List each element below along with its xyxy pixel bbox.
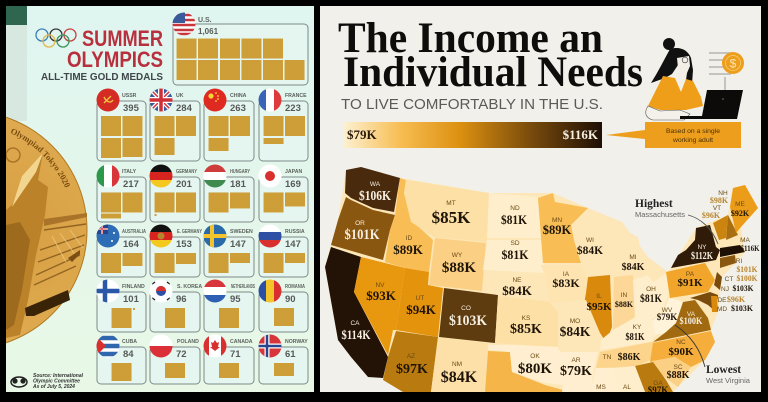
country: Russia: 147 bbox=[285, 239, 301, 250]
state: Virginia bbox=[653, 300, 711, 342]
map labels: $106K bbox=[359, 189, 391, 204]
country: Canada: CANADA bbox=[230, 339, 253, 345]
map labels: SC bbox=[673, 364, 683, 371]
callout: highest: Massachusetts bbox=[635, 210, 685, 219]
country: Australia: 164 bbox=[123, 239, 140, 250]
country: Australia: AUSTRALIA bbox=[122, 229, 146, 235]
panel: income an individual needs bbox=[320, 6, 761, 395]
icon: dollar coin bbox=[709, 52, 744, 90]
map labels: $90K bbox=[668, 346, 694, 358]
map labels: IA bbox=[563, 271, 570, 278]
country: Norway: 61 bbox=[285, 349, 296, 360]
map labels: IL bbox=[596, 293, 602, 300]
country: Romania: 90 bbox=[285, 294, 296, 305]
map labels: CO bbox=[461, 305, 471, 312]
map labels: OK bbox=[530, 353, 540, 360]
country: Germany: GERMANY bbox=[176, 169, 197, 175]
state: Minnesota bbox=[538, 193, 588, 263]
source note bbox=[32, 373, 84, 390]
state: Delaware bbox=[711, 296, 718, 312]
country: France: 223 bbox=[285, 103, 301, 114]
callout: highest bbox=[635, 198, 685, 219]
country: Canada: 71 bbox=[230, 349, 241, 360]
country: Australia bbox=[96, 224, 146, 277]
state: California bbox=[325, 247, 388, 378]
country: Poland: 72 bbox=[176, 349, 187, 360]
country: S. Korea: 96 bbox=[176, 294, 187, 305]
map labels: NY bbox=[697, 244, 707, 251]
state: Colorado bbox=[439, 288, 498, 343]
state: Connecticut bbox=[720, 255, 736, 268]
panel: summer olympics gold medals bbox=[6, 6, 314, 392]
callout: single working adult: working adult bbox=[672, 137, 713, 144]
legend gradient bar: $116K bbox=[563, 127, 599, 142]
olympic rings bbox=[36, 29, 76, 47]
country: Norway: NORWAY bbox=[285, 339, 308, 345]
state: Ohio bbox=[633, 272, 668, 320]
map labels: $93K bbox=[366, 288, 397, 303]
map labels: $79K bbox=[657, 312, 677, 322]
state: Wisconsin bbox=[573, 218, 622, 277]
country: UK bbox=[149, 88, 200, 161]
ribbon strip bbox=[6, 6, 27, 121]
state: Georgia bbox=[635, 362, 673, 392]
country: Germany bbox=[149, 164, 200, 222]
map labels: $100K bbox=[736, 273, 758, 283]
state: Michigan bbox=[618, 232, 648, 275]
source note: Olympic Committee bbox=[33, 378, 80, 384]
country: Netherlands: 95 bbox=[230, 294, 241, 305]
country: USSR: 395 bbox=[123, 103, 140, 114]
country: Finland: FINLAND bbox=[122, 284, 145, 290]
map labels: RI bbox=[736, 258, 742, 265]
country: China bbox=[203, 88, 254, 161]
country: USSR bbox=[96, 88, 146, 161]
legend gradient bar: $79K bbox=[347, 127, 378, 142]
map labels: $83K bbox=[552, 276, 580, 290]
map labels: $100K bbox=[680, 316, 702, 326]
country: E. Germany bbox=[149, 224, 202, 277]
country: S. Korea bbox=[149, 279, 202, 332]
map labels: $101K bbox=[344, 227, 380, 243]
map labels: UT bbox=[416, 295, 424, 302]
map labels: WV bbox=[662, 307, 673, 314]
country: S. Korea: S. KOREA bbox=[177, 284, 202, 290]
map labels: $85K bbox=[432, 208, 471, 227]
country: Italy: 217 bbox=[123, 179, 139, 190]
icon: woman at laptop bbox=[646, 38, 743, 120]
country: China: CHINA bbox=[230, 93, 247, 99]
country: Romania bbox=[258, 279, 308, 332]
country: Russia: RUSSIA bbox=[285, 229, 305, 235]
country: Hungary: HUNGARY bbox=[230, 169, 250, 175]
country: Cuba bbox=[96, 334, 146, 384]
title: OLYMPICS bbox=[67, 47, 163, 72]
country: Japan bbox=[258, 164, 308, 222]
arrow: to Massachusetts bbox=[688, 215, 718, 244]
state: Massachusetts bbox=[720, 245, 745, 257]
country: Netherlands: NETHERLANDS bbox=[231, 284, 255, 290]
country: China: 263 bbox=[230, 103, 246, 114]
state: Utah bbox=[396, 268, 443, 337]
map labels: WA bbox=[370, 181, 381, 188]
map labels: ID bbox=[406, 235, 413, 242]
map labels: $103K bbox=[731, 303, 753, 313]
country: Sweden bbox=[203, 224, 254, 277]
country: France bbox=[258, 88, 308, 161]
map labels: $88K bbox=[442, 260, 476, 276]
state: West Virginia bbox=[653, 298, 685, 335]
title: SUMMER bbox=[82, 26, 163, 51]
map labels: ME bbox=[735, 201, 746, 208]
choropleth map of US states bbox=[325, 167, 758, 392]
state: Kentucky bbox=[600, 317, 661, 350]
map labels: $81K bbox=[626, 332, 645, 343]
map labels: NE bbox=[512, 277, 522, 284]
map labels: MO bbox=[570, 318, 580, 325]
country: E. Germany: E. GERMANY bbox=[177, 229, 202, 235]
map labels: MT bbox=[446, 200, 456, 207]
map labels: $81K bbox=[501, 212, 528, 227]
map labels: DE bbox=[717, 297, 727, 304]
state: North Carolina bbox=[650, 331, 715, 367]
country: Japan: 169 bbox=[285, 179, 301, 190]
map labels: $98K bbox=[710, 196, 729, 205]
state: Maryland bbox=[690, 292, 718, 312]
country: Finland: 101 bbox=[123, 294, 140, 305]
map labels: GA bbox=[653, 380, 663, 387]
title bbox=[41, 30, 163, 80]
state: Washington bbox=[345, 167, 400, 212]
map labels: VA bbox=[687, 311, 696, 318]
state: New York bbox=[671, 225, 720, 268]
map labels: $94K bbox=[406, 302, 437, 317]
publisher logo bbox=[11, 377, 27, 387]
map labels: MS bbox=[596, 384, 607, 391]
map labels: $101K bbox=[736, 264, 758, 274]
state: Indiana bbox=[613, 275, 635, 330]
heading: The Income an bbox=[338, 15, 603, 62]
country: Italy: ITALY bbox=[122, 169, 137, 175]
state: Missouri bbox=[550, 300, 606, 351]
map labels: PA bbox=[686, 271, 695, 278]
country: Finland bbox=[96, 279, 146, 332]
subtitle: TO LIVE COMFORTABLY IN THE U.S. bbox=[341, 96, 603, 113]
map labels: NH bbox=[718, 190, 728, 197]
map labels: $88K bbox=[667, 370, 690, 381]
state: Wyoming bbox=[429, 238, 486, 291]
map labels: SD bbox=[510, 240, 520, 247]
country: U.S.: 1,061 bbox=[198, 27, 219, 36]
source note: As of July 5, 2024 bbox=[32, 384, 75, 390]
callout: single working adult bbox=[606, 122, 741, 148]
source note: Source: International bbox=[33, 373, 84, 379]
state: South Carolina bbox=[652, 357, 691, 387]
map labels: $84K bbox=[560, 324, 591, 339]
country: Hungary: 181 bbox=[230, 179, 247, 190]
country: Japan: JAPAN bbox=[285, 169, 302, 175]
map labels: $114K bbox=[342, 327, 371, 342]
state: Oregon bbox=[331, 197, 395, 260]
state: Arkansas bbox=[558, 352, 598, 392]
map labels: $96K bbox=[702, 211, 721, 220]
country: Poland: POLAND bbox=[177, 339, 199, 345]
map labels: MD bbox=[717, 306, 727, 313]
country: Russia bbox=[258, 224, 308, 277]
country: Hungary bbox=[203, 164, 254, 222]
map labels: $81K bbox=[640, 291, 663, 305]
country: Romania: ROMANIA bbox=[285, 284, 305, 290]
map labels: AZ bbox=[407, 353, 415, 360]
map labels: AR bbox=[571, 357, 581, 364]
state: Nebraska bbox=[482, 272, 550, 303]
country: UK: UK bbox=[176, 93, 184, 99]
state: Texas bbox=[485, 351, 570, 392]
country: U.S. bbox=[172, 12, 308, 85]
map labels: $81K bbox=[502, 247, 529, 262]
map labels: $84K bbox=[577, 244, 603, 257]
callout: lowest: Lowest bbox=[706, 364, 741, 376]
state: Alabama bbox=[613, 366, 645, 392]
map labels: MI bbox=[629, 254, 637, 261]
country: Germany: 201 bbox=[176, 179, 193, 190]
country: Poland bbox=[149, 334, 200, 384]
map labels: KS bbox=[522, 315, 531, 322]
state: Nevada bbox=[354, 257, 405, 355]
country: France: FRANCE bbox=[285, 93, 307, 99]
map labels: OH bbox=[646, 286, 656, 293]
map labels: NV bbox=[375, 282, 385, 289]
map labels: WY bbox=[452, 252, 463, 259]
map labels: $84K bbox=[622, 262, 645, 273]
country: UK: 284 bbox=[176, 103, 193, 114]
map labels: $112K bbox=[691, 251, 713, 262]
map labels: KY bbox=[633, 324, 642, 331]
map labels: NJ bbox=[721, 286, 729, 293]
state: Mississippi bbox=[590, 368, 618, 392]
map base silhouette bbox=[325, 170, 758, 392]
callout: single working adult: Based on a single bbox=[666, 128, 720, 135]
map labels: IN bbox=[621, 292, 628, 299]
country: Cuba: 84 bbox=[123, 349, 134, 360]
callout: lowest: West Virginia bbox=[706, 376, 751, 385]
title: ALL-TIME GOLD MEDALS bbox=[41, 71, 163, 83]
country: U.S.: U.S. bbox=[198, 17, 212, 24]
country: Cuba: CUBA bbox=[122, 339, 137, 345]
country: Norway bbox=[258, 334, 308, 384]
icon: dollar coin: $ bbox=[730, 56, 737, 70]
map labels: $79K bbox=[560, 364, 592, 379]
callout: lowest bbox=[706, 364, 751, 385]
map labels: $91K bbox=[677, 277, 703, 289]
map labels: NC bbox=[676, 339, 686, 346]
state: New Hampshire bbox=[726, 215, 738, 240]
map labels: $103K bbox=[732, 283, 754, 293]
map labels: CA bbox=[350, 320, 360, 327]
heading: Individual Needs bbox=[343, 49, 643, 96]
map labels: $88K bbox=[615, 300, 634, 309]
state: North Dakota bbox=[487, 193, 541, 238]
map labels: TN bbox=[603, 354, 612, 361]
state: New Mexico bbox=[431, 337, 488, 392]
state: South Dakota bbox=[483, 240, 545, 273]
arrow: to West Virginia bbox=[675, 325, 705, 367]
gold medal illustration: Olympiad Tokyo 2020 bbox=[11, 128, 70, 188]
state: Montana bbox=[404, 180, 489, 242]
map labels: $97K bbox=[396, 362, 428, 377]
map labels: $80K bbox=[518, 361, 552, 377]
map labels: AL bbox=[623, 384, 631, 391]
map labels: MA bbox=[740, 237, 751, 244]
country: Netherlands bbox=[203, 279, 255, 332]
gold medal illustration bbox=[6, 116, 88, 344]
country: USSR: USSR bbox=[122, 93, 137, 99]
state: Kansas bbox=[495, 296, 558, 347]
map labels: WI bbox=[586, 237, 594, 244]
map labels bbox=[342, 181, 760, 395]
country: Sweden: SWEDEN bbox=[230, 229, 253, 235]
country: E. Germany: 153 bbox=[176, 239, 192, 250]
country: Sweden: 147 bbox=[230, 239, 246, 250]
state: Idaho bbox=[385, 178, 433, 272]
map labels: ND bbox=[510, 205, 520, 212]
state: Pennsylvania bbox=[666, 263, 715, 298]
callout: highest: Highest bbox=[635, 198, 673, 210]
map labels: MN bbox=[552, 217, 562, 224]
country: Canada bbox=[203, 334, 254, 384]
map labels: CT bbox=[725, 276, 733, 283]
map labels: $92K bbox=[731, 209, 750, 218]
state: Arizona bbox=[383, 331, 438, 392]
country: Italy bbox=[96, 164, 146, 222]
state: Tennessee bbox=[596, 340, 673, 368]
heading bbox=[338, 22, 642, 86]
map labels: $97K bbox=[648, 385, 668, 395]
map labels: NM bbox=[452, 361, 462, 368]
legend gradient bar bbox=[344, 122, 602, 148]
state: Oklahoma bbox=[488, 345, 563, 385]
map labels: $86K bbox=[618, 352, 641, 363]
map labels: $103K bbox=[449, 313, 487, 329]
map labels: $89K bbox=[543, 223, 572, 237]
map labels: $96K bbox=[727, 295, 746, 304]
map labels: OR bbox=[355, 220, 365, 227]
state: Vermont bbox=[713, 215, 728, 240]
state: Iowa bbox=[541, 265, 590, 303]
state: New Jersey bbox=[714, 272, 722, 290]
map labels: $85K bbox=[510, 322, 542, 337]
map labels: $95K bbox=[586, 301, 612, 313]
state: Maine bbox=[730, 185, 758, 233]
map labels: $84K bbox=[441, 369, 478, 386]
map labels: VT bbox=[713, 205, 721, 212]
map labels: $84K bbox=[502, 283, 533, 298]
map labels: $116K bbox=[740, 243, 760, 253]
map labels: $89K bbox=[393, 242, 424, 257]
state: Illinois bbox=[583, 275, 612, 342]
